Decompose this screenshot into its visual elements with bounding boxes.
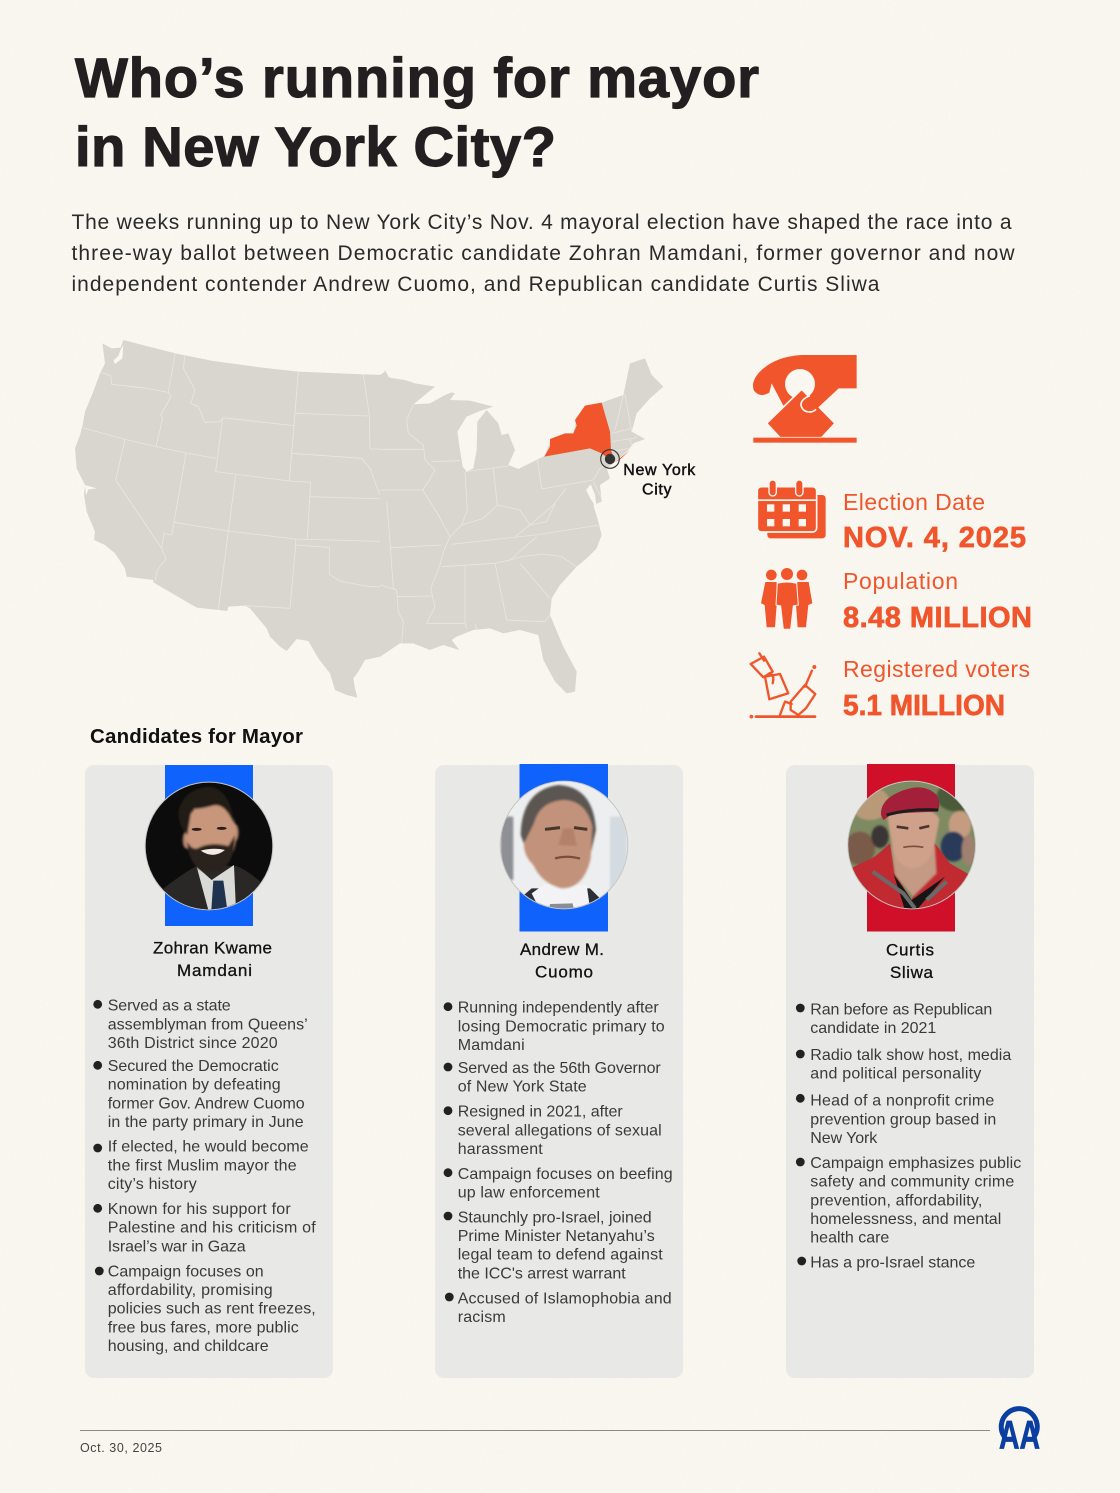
portrait: Sliwa (845, 780, 980, 917)
intro text (72, 211, 1015, 296)
stat: population: 8.48 MILLION (843, 602, 1032, 634)
bullet list: in the party primary in June (108, 1114, 304, 1131)
bullet list: former Gov. Andrew Cuomo (108, 1095, 305, 1112)
stat: election date: Election Date (843, 489, 985, 515)
bullet list: homelessness, and mental (810, 1211, 1001, 1228)
bullet list: several allegations of sexual (458, 1122, 662, 1139)
candidate name (153, 938, 272, 980)
bullet list: Running independently after (458, 1000, 659, 1017)
footer date: Oct. 30, 2025 (80, 1441, 162, 1455)
stat: population (761, 568, 1032, 634)
map: western states (75, 340, 390, 698)
bullet list: Known for his support for (108, 1201, 291, 1218)
bullet list: up law enforcement (458, 1185, 600, 1202)
bullet list: and political personality (810, 1066, 981, 1083)
bullet list: Campaign emphasizes public (810, 1155, 1021, 1172)
bullet list: Campaign focuses on beefing (458, 1166, 673, 1183)
stat: election date: NOV. 4, 2025 (843, 522, 1026, 554)
candidate name: Sliwa (890, 963, 934, 982)
stat: registered voters: 5.1 MILLION (843, 690, 1005, 722)
stat: population: Population (843, 568, 958, 594)
portrait: Cuomo (500, 780, 633, 917)
map label: New York City (623, 462, 696, 498)
bullet list (93, 998, 316, 1355)
bullet list: the ICC's arrest warrant (458, 1265, 626, 1282)
bullet list (444, 1000, 673, 1326)
bullet list: Has a pro-Israel stance (810, 1255, 975, 1272)
title: in New York City? (75, 115, 556, 178)
bullet list: Secured the Democratic (108, 1058, 279, 1075)
bullet list: 36th District since 2020 (108, 1035, 278, 1052)
bullet list: Staunchly pro-Israel, joined (458, 1209, 652, 1226)
bullet list: of New York State (458, 1079, 587, 1096)
bullet list: prevention, affordability, (810, 1192, 982, 1209)
bullet list: nomination by defeating (108, 1077, 281, 1094)
candidate name: Andrew M. (520, 940, 604, 959)
bullet list: candidate in 2021 (810, 1020, 936, 1037)
candidate name: Curtis (886, 940, 934, 960)
bullet list (796, 1001, 1021, 1272)
candidate name: Mamdani (177, 961, 252, 980)
icon: three people (761, 568, 812, 629)
bullet list: New York (810, 1130, 878, 1147)
bullet list: Palestine and his criticism of (108, 1220, 316, 1237)
bullet list: Served as a state (108, 998, 231, 1015)
candidate name (886, 940, 934, 982)
party color bar (867, 764, 955, 932)
bullet list: Campaign focuses on (108, 1263, 264, 1280)
party color bar (165, 765, 253, 926)
bullet list: Head of a nonprofit crime (810, 1093, 994, 1110)
bullet list: Accused of Islamophobia and (458, 1290, 672, 1307)
bullet list: legal team to defend against (458, 1247, 663, 1264)
map: United States with New York highlighted (75, 340, 663, 698)
bullet list: prevention group based in (810, 1111, 996, 1128)
bullet list: Israel’s war in Gaza (108, 1238, 246, 1255)
map label: New York City: New York (623, 462, 696, 479)
bullet list: health care (810, 1230, 889, 1247)
logo: Anadolu Agency: AA (999, 1414, 1040, 1458)
stat: election date (757, 480, 1026, 554)
bullet list: Radio talk show host, media (810, 1047, 1011, 1064)
panel: Andrew Cuomo (435, 764, 683, 1378)
logo: Anadolu Agency (999, 1409, 1040, 1458)
map pin: New York City (601, 450, 619, 468)
bullet list: Ran before as Republican (810, 1001, 992, 1018)
bullet list: Served as the 56th Governor (458, 1060, 661, 1077)
bullet list: If elected, he would become (108, 1139, 309, 1156)
stat: registered voters: Registered voters (843, 656, 1030, 682)
stat: registered voters (751, 653, 1030, 722)
bullet list: the first Muslim mayor the (108, 1157, 297, 1174)
section heading: Candidates for Mayor (90, 725, 303, 748)
bullet list: losing Democratic primary to (458, 1018, 665, 1035)
icon: calendar (757, 480, 826, 538)
bullet list: Mamdani (458, 1037, 525, 1054)
map: eastern states (380, 358, 663, 693)
title: Who’s running for mayor (75, 46, 759, 109)
map label: New York City: City (642, 481, 672, 498)
title (75, 46, 759, 178)
panel: Curtis Sliwa (786, 764, 1034, 1378)
bullet list: Prime Minister Netanyahu’s (458, 1228, 655, 1245)
candidate name: Cuomo (535, 962, 593, 982)
bullet list: affordability, promising (108, 1282, 273, 1299)
map: New York state (544, 403, 630, 462)
intro text: independent contender Andrew Cuomo, and Republican candidate Curtis Sliwa (72, 273, 880, 296)
bullet list: Resigned in 2021, after (458, 1104, 623, 1121)
icon: hand casting ballot (753, 355, 857, 443)
bullet list: city’s history (108, 1176, 197, 1193)
candidate name: Zohran Kwame (153, 938, 272, 958)
bullet list: racism (458, 1309, 506, 1326)
bullet list: assemblyman from Queens’ (108, 1016, 308, 1033)
bullet list: policies such as rent freezes, (108, 1301, 316, 1318)
icon: hands voting (751, 653, 815, 717)
candidate name (520, 940, 604, 982)
bullet list: harassment (458, 1141, 543, 1158)
panel: Zohran Mamdani (85, 765, 333, 1378)
bullet list: free bus fares, more public (108, 1319, 299, 1336)
bullet list: safety and community crime (810, 1174, 1014, 1191)
intro text: The weeks running up to New York City’s Nov. 4 mayoral election have shaped the race into a (72, 211, 1012, 234)
intro text: three-way ballot between Democratic candidate Zohran Mamdani, former governor and now (72, 242, 1015, 265)
bullet list: housing, and childcare (108, 1338, 269, 1355)
party color bar (520, 764, 608, 932)
portrait: Mamdani (143, 780, 277, 917)
